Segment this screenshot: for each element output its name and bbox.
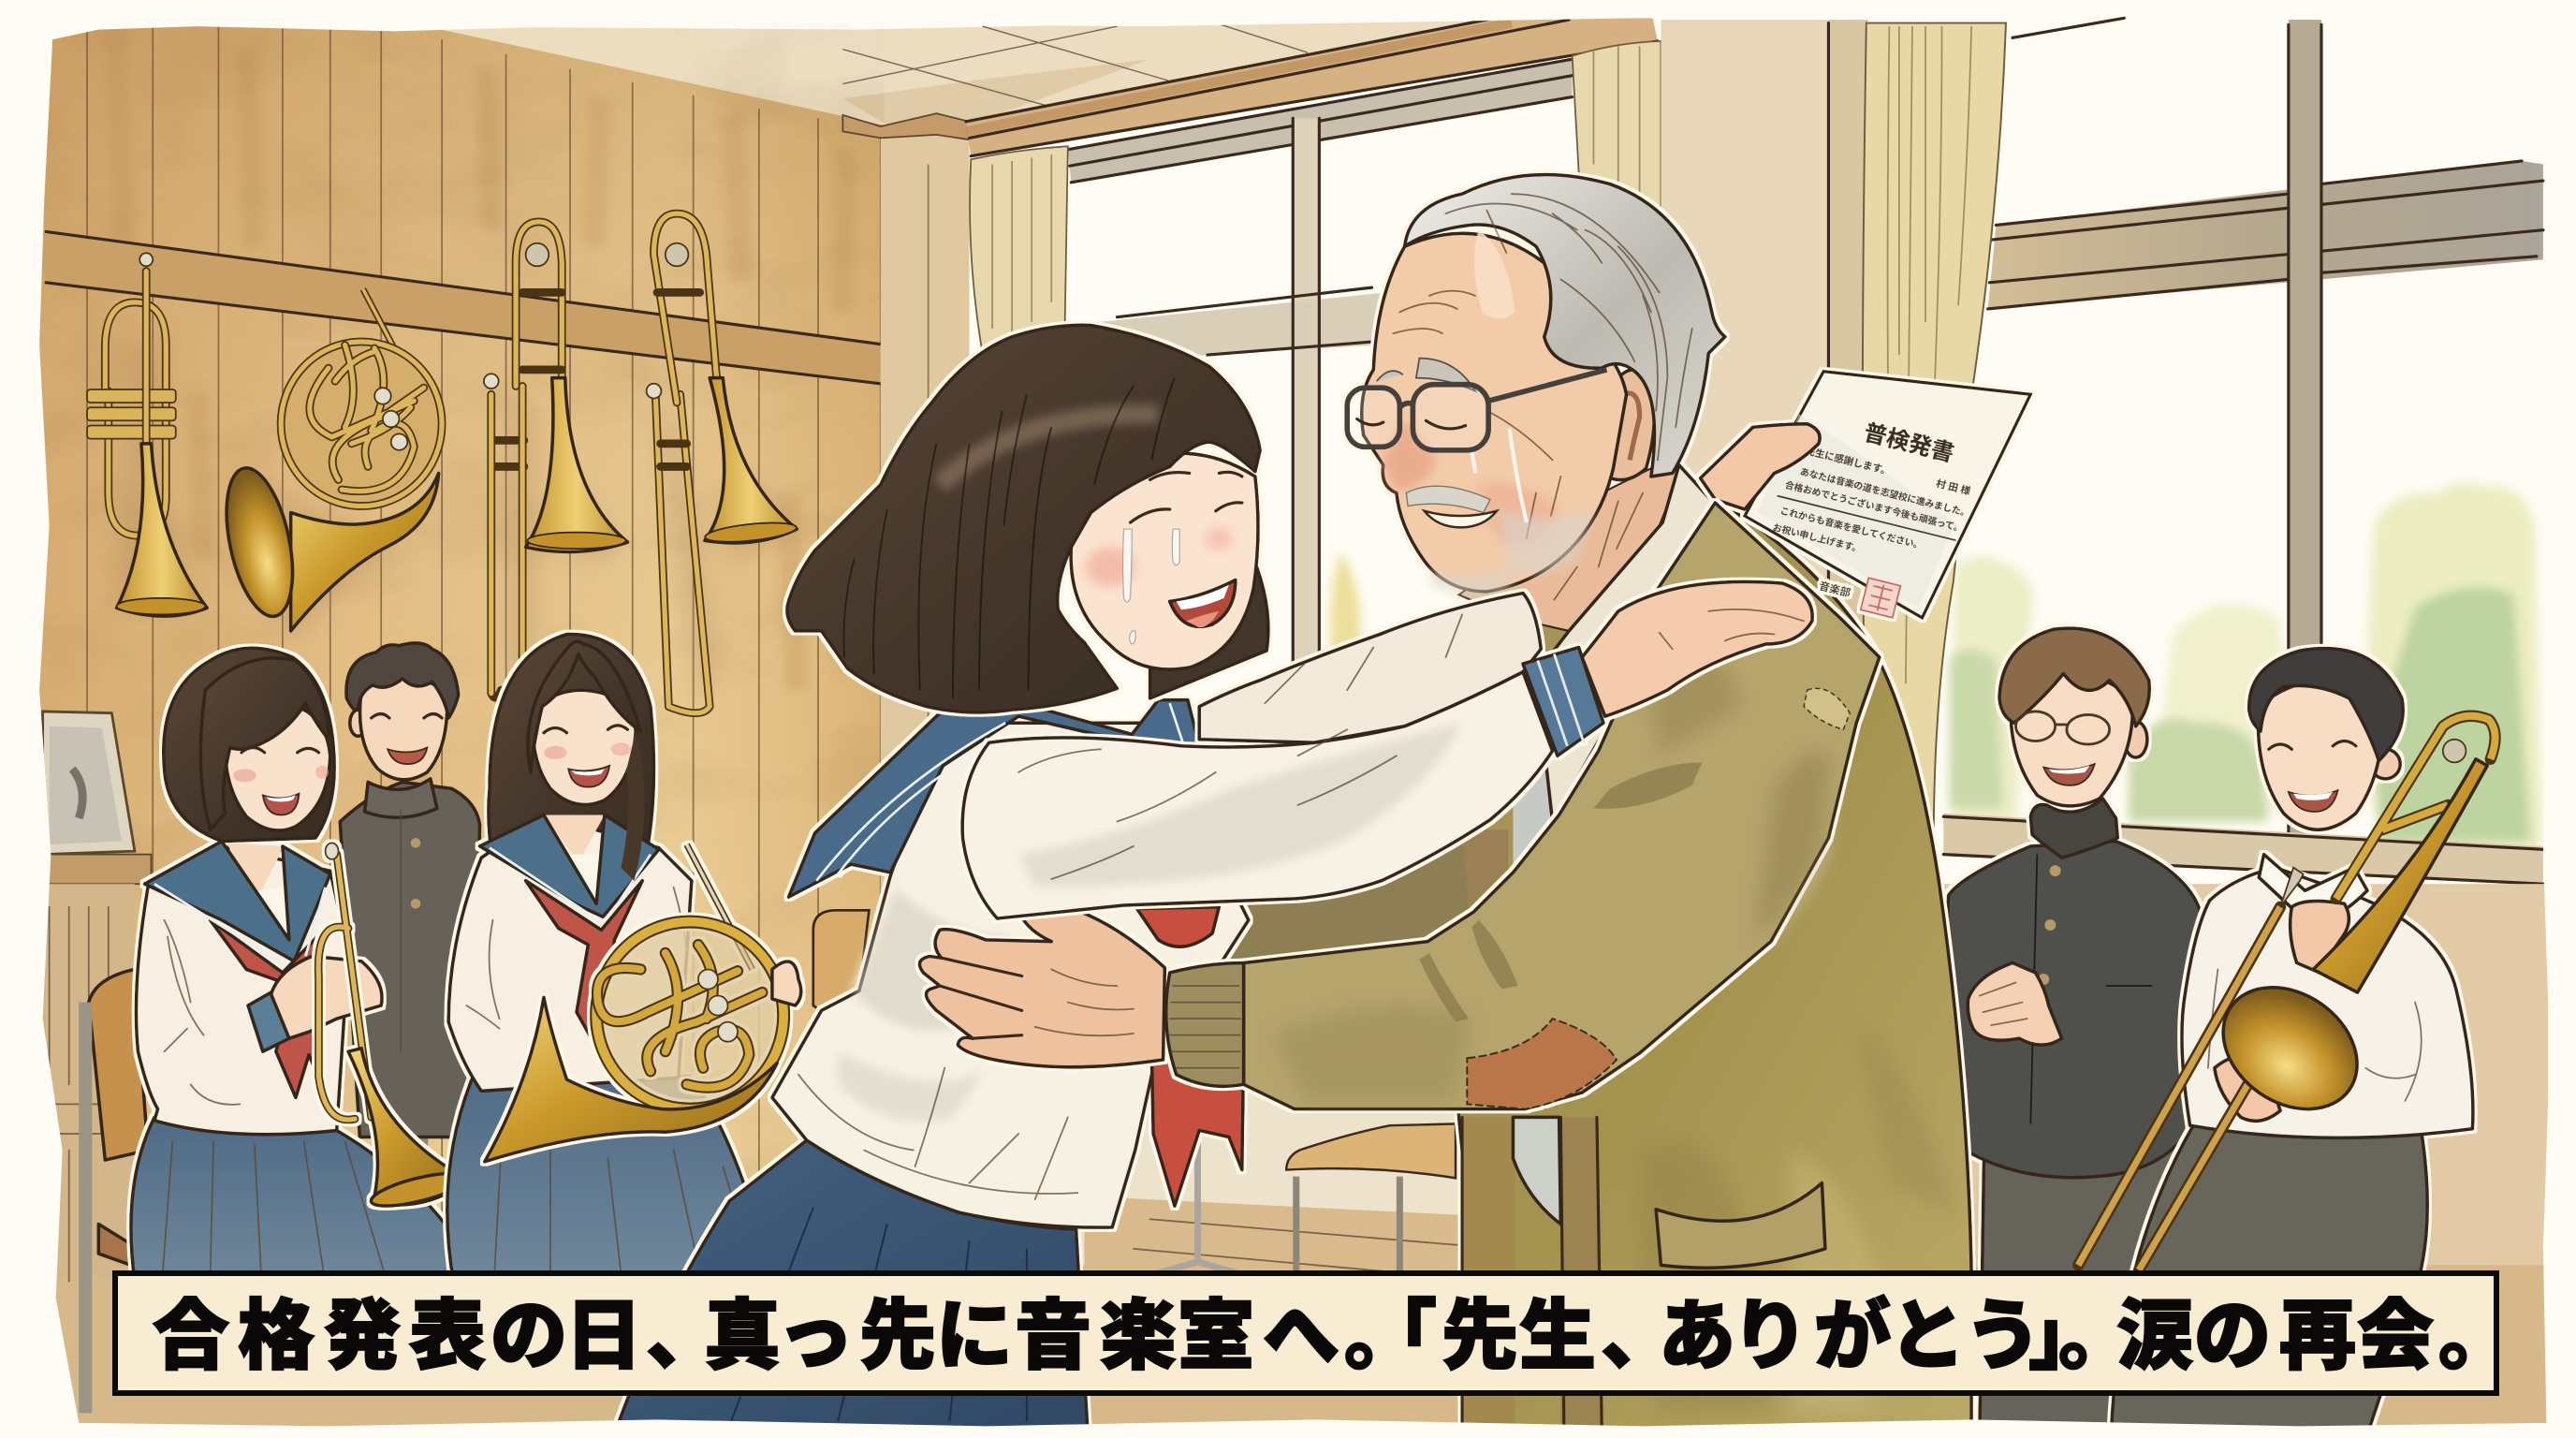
far arm sleeve [1199, 594, 1541, 742]
shirt collar [1536, 465, 1714, 822]
navy sailor collar [788, 700, 1199, 897]
neck and undershirt [544, 814, 605, 862]
shirt strip below arm [1513, 1117, 1560, 1224]
red scarf [211, 920, 326, 1097]
main girl arms [962, 581, 1812, 918]
back hair [489, 634, 654, 879]
student boy with glasses [1947, 628, 2204, 1430]
elbow patch [1467, 1019, 1617, 1109]
navy collar [479, 814, 659, 917]
face [1362, 233, 1627, 592]
horizontal wall rail [46, 231, 887, 385]
legs [1980, 1117, 2190, 1430]
eyebrow [1377, 359, 1475, 391]
back hair [164, 648, 334, 842]
framed portrait on shelf [43, 712, 135, 855]
navy skirt [616, 1140, 1088, 1430]
placket and knit front [1462, 829, 1508, 986]
shoulder patch [1804, 688, 1850, 729]
hair [1999, 628, 2149, 726]
ear [2124, 721, 2147, 757]
hand holding certificate [1701, 424, 1820, 509]
student boy in dark uniform, back row [340, 643, 479, 1137]
hand on girl's back [919, 901, 1164, 1067]
beard stubble [1431, 509, 1593, 595]
pillar and crown moulding [842, 113, 970, 949]
dark lower-front cardigan [1219, 829, 1471, 973]
ear [1606, 370, 1654, 480]
back hair [1150, 559, 1268, 698]
trumpet held by girl one [318, 843, 470, 1212]
right window [1943, 17, 2546, 884]
bangs [200, 658, 329, 829]
caption banner [115, 1273, 2515, 1393]
shirt strip above arm [1513, 756, 1560, 879]
cuff [248, 992, 289, 1051]
closed eyes [1131, 503, 1242, 522]
wall trumpet [87, 253, 207, 616]
certificate document: これからも音楽を愛してください。 [1779, 505, 1924, 551]
hand on shoulder [1582, 581, 1812, 716]
tears [1123, 529, 1179, 644]
stand collar [2030, 799, 2117, 858]
student girl two with French horn [447, 634, 772, 1282]
wall trombone two [647, 213, 798, 713]
moustache [1406, 486, 1490, 513]
skirt [447, 1068, 772, 1282]
ribbed cuff [1166, 962, 1244, 1086]
teacher body and head [1219, 174, 1971, 1430]
certificate document: 合格おめでとうございます今後も頑張って。 [1784, 478, 1964, 535]
blush [1086, 547, 1135, 587]
certificate document: 村 田 様 [1935, 477, 1972, 497]
student boy with trombone [2111, 648, 2473, 1434]
jacket [1947, 842, 2204, 1178]
neck [1459, 468, 1682, 631]
closed eye [1426, 420, 1466, 429]
right small curtain [1573, 41, 1661, 222]
main girl skirt and torso [616, 700, 1249, 1430]
chair behind boy and girl two [417, 940, 457, 1249]
clasped hands [1968, 962, 2062, 1045]
blouse [448, 814, 692, 1091]
ceiling [394, 17, 1495, 125]
certificate title: 普検発書 [1861, 419, 1956, 467]
mouth [1425, 511, 1497, 527]
face [225, 703, 330, 830]
front hair strands [621, 731, 644, 881]
face [533, 690, 636, 805]
long curtain [1863, 23, 2006, 844]
navy cuff [1523, 647, 1603, 756]
mouth [1170, 580, 1236, 626]
pocket [1656, 1183, 1825, 1268]
caption banner: 合格発表の日、真っ先に音楽室へ。「先生、ありがとう」。涙の再会。 [153, 1294, 2515, 1379]
face [2011, 674, 2132, 806]
hair [787, 325, 1260, 712]
wall trombone one [484, 222, 627, 707]
certificate document [1701, 372, 2030, 630]
hand [271, 956, 382, 1038]
student girl one with trumpet [131, 648, 485, 1282]
wood panel wall [33, 23, 884, 1298]
wall French horn [215, 289, 442, 640]
certificate document: 先生に感謝します。 [1804, 445, 1892, 477]
left curtain [970, 146, 1068, 353]
bookshelf [37, 855, 151, 1282]
lower wall right [1943, 884, 2548, 1278]
lower wall centre [970, 888, 1528, 1282]
blouse [136, 846, 348, 1135]
music stand pole [1151, 1123, 1244, 1275]
chair behind main girl [813, 910, 869, 1012]
red scarf tails [1151, 1051, 1244, 1206]
face [1071, 453, 1258, 669]
left classroom window [970, 39, 1662, 1038]
navy collar [144, 842, 330, 961]
left chair behind girl one [85, 969, 172, 1413]
floor [33, 1196, 2554, 1438]
cardigan body [1445, 500, 1971, 1430]
neck and undershirt [227, 843, 285, 901]
small chair centre [1286, 1123, 1456, 1273]
French horn held by girl two [485, 844, 801, 1162]
near arm sleeve [962, 672, 1553, 918]
red scarf [526, 881, 642, 1038]
skirt [131, 1117, 485, 1282]
window beam [966, 18, 1658, 156]
certificate document: 音楽部 [1818, 580, 1852, 600]
teacher arm and hand [919, 503, 1880, 1109]
hair [1405, 174, 1725, 477]
certificate document: お祝い申し上げます。 [1771, 521, 1863, 555]
beige wall column [1661, 20, 1868, 940]
bangs [528, 641, 640, 772]
blouse torso [772, 723, 1249, 1227]
certificate document: あなたは音楽の道を志望校に進みました。 [1799, 465, 1971, 520]
tears [1472, 431, 1526, 521]
hair highlight [940, 414, 1158, 485]
glasses [1347, 370, 1606, 450]
trombone held by boy [2078, 716, 2496, 1270]
sleeve and shoulder [1244, 503, 1880, 1109]
main girl head [787, 325, 1268, 712]
red scarf knot [1137, 907, 1219, 946]
